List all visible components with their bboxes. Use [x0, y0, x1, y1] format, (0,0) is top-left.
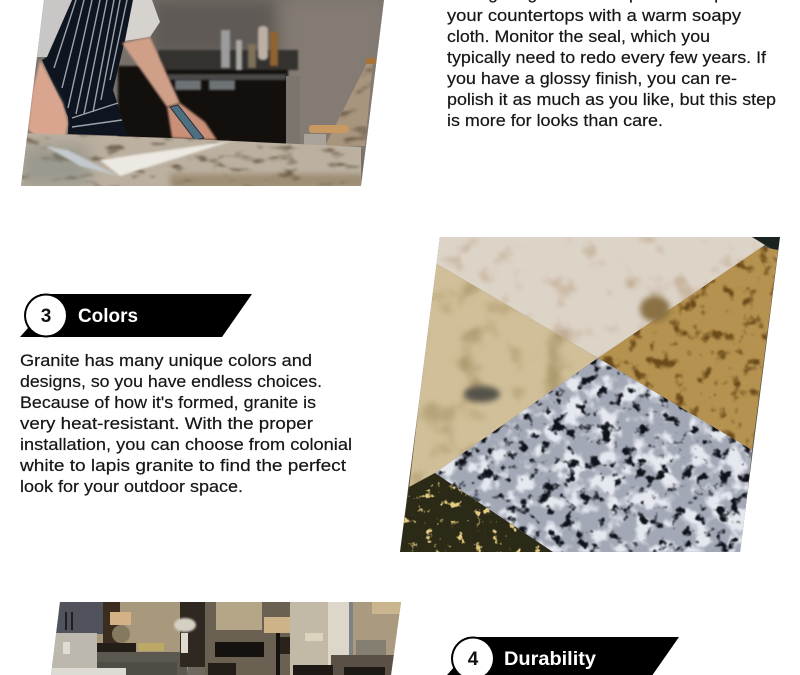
beige granite sample	[405, 260, 600, 492]
wooden board and handle	[326, 64, 372, 146]
paragraph: care: cloth. Monitor the seal, which you	[447, 27, 710, 46]
arms	[122, 37, 180, 107]
cream granite sample	[430, 237, 770, 362]
polish streak	[100, 141, 232, 176]
gold brown granite sample	[595, 245, 785, 455]
white table top	[51, 668, 126, 675]
backsplash counter	[50, 633, 97, 675]
photo: four granite colour samples	[400, 237, 785, 552]
floor lamp	[264, 617, 290, 633]
heading banner: 4 Durability	[447, 636, 679, 675]
paragraph: colors: Granite has many unique colors and	[20, 351, 312, 370]
heading banner: 3 Colors: Colors	[78, 306, 138, 327]
paragraph: colors: very heat-resistant. With the proper	[20, 414, 313, 433]
speckled grey granite sample	[430, 355, 755, 552]
photo: person polishing a granite countertop	[20, 0, 385, 190]
dark veined granite sample	[400, 470, 555, 552]
white shirt	[37, 0, 72, 57]
heading banner: 4 Durability: 4	[468, 649, 479, 670]
dark corner	[752, 237, 780, 252]
blurred brown blotch	[640, 296, 670, 322]
paragraph: colors: Because of how it's formed, granite is	[20, 393, 316, 412]
stone fireplace wall	[205, 602, 290, 675]
bottles on shelf	[221, 26, 278, 70]
granite countertop	[21, 133, 361, 186]
photo: outdoor living room with granite	[50, 602, 402, 675]
paragraph: care: you have a glossy finish, you can re-	[447, 69, 737, 88]
dark console and table lamp	[97, 643, 136, 652]
paragraph: care: polish it as much as you like, but this step	[447, 90, 776, 109]
dining chairs	[331, 655, 395, 675]
bright wall and window	[290, 602, 328, 675]
paragraph: colors: look for your outdoor space.	[20, 477, 243, 496]
scraper tool	[170, 105, 204, 140]
cushion	[138, 643, 164, 651]
paragraph: care: typically need to redo every few years. If	[447, 48, 766, 67]
paragraph: colors: installation, you can choose from colonial	[20, 435, 352, 454]
heading banner: 4 Durability: Durability	[504, 649, 596, 670]
paragraph: care	[447, 0, 776, 130]
paragraph: care: is more for looks than care.	[447, 111, 663, 130]
apron	[42, 0, 133, 136]
grey kitchen cabinet	[56, 602, 103, 634]
dark shelf and flowers	[180, 602, 205, 667]
heading banner: 3 Colors: 3	[41, 306, 51, 327]
paragraph: care: your countertops with a warm soapy	[447, 6, 742, 25]
heading banner: 3 Colors	[20, 294, 252, 338]
paragraph: colors	[19, 351, 352, 496]
grey sofa	[97, 652, 188, 675]
dark kitchen cabinet	[118, 66, 288, 146]
paragraph: colors: white to lapis granite to find the perfect	[19, 456, 346, 475]
paragraph: colors: designs, so you have endless choices.	[20, 372, 322, 391]
